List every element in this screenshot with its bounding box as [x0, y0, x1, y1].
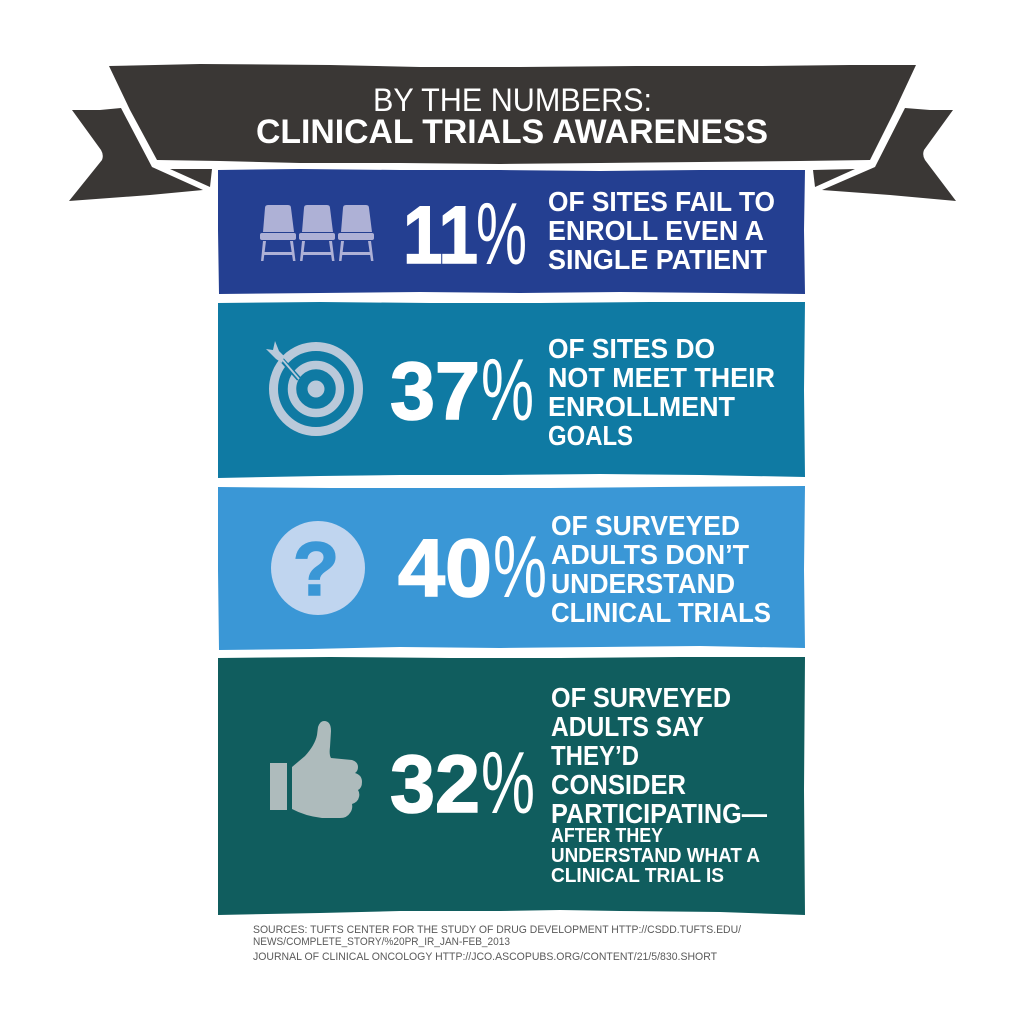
statistic: 37%: [390, 340, 534, 439]
icon: thumbs up: [270, 721, 362, 818]
statistic: 40%: %: [493, 517, 547, 616]
description: ENROLL EVEN A: [548, 215, 764, 246]
banner title text: [256, 82, 768, 151]
description: AFTER THEY: [551, 825, 664, 847]
banner title text: CLINICAL TRIALS AWARENESS: [256, 113, 768, 151]
description: ADULTS DON’T: [551, 539, 749, 570]
statistic: 11%: [403, 184, 527, 283]
description: CONSIDER: [551, 769, 686, 800]
title banner: [69, 64, 956, 201]
description: ENROLLMENT: [548, 391, 735, 422]
statistic: 32%: 32: [390, 739, 480, 830]
description: [551, 682, 767, 887]
panel: 40 percent of adults: [218, 486, 805, 650]
statistic: 32%: [390, 733, 535, 832]
banner right tail: [813, 108, 956, 201]
description: CLINICAL TRIALS: [551, 597, 771, 628]
description: OF SITES DO: [548, 333, 715, 364]
statistic: 37%: %: [481, 340, 534, 439]
banner title text: BY THE NUMBERS:: [373, 82, 652, 118]
description: UNDERSTAND WHAT A: [551, 845, 760, 867]
description: OF SURVEYED: [551, 510, 740, 541]
icon: question mark: ?: [293, 527, 339, 612]
description: [548, 186, 775, 275]
panel: 32 percent of adults: [218, 657, 805, 915]
sources: JOURNAL OF CLINICAL ONCOLOGY HTTP://JCO.ASCOPUBS.ORG/CONTENT/21/5/830.SHORT: [253, 951, 717, 963]
banner main ribbon: [109, 64, 916, 164]
statistic: 32%: %: [481, 733, 535, 832]
description: [551, 510, 771, 628]
panel background: [218, 657, 805, 915]
description: ADULTS SAY: [551, 711, 704, 742]
statistic: 11%: %: [476, 184, 527, 283]
statistic: 40%: [398, 517, 547, 616]
panel background: [218, 486, 805, 650]
statistic: 37%: 37: [390, 346, 480, 437]
panel background: [218, 169, 805, 294]
statistic: 40%: 40: [398, 523, 492, 614]
description: [548, 333, 775, 451]
sources: [253, 924, 742, 963]
description: SINGLE PATIENT: [548, 244, 767, 275]
statistic: 11%: 11: [403, 190, 478, 281]
panel: 37 percent of sites: [218, 302, 805, 478]
description: OF SITES FAIL TO: [548, 186, 775, 217]
icon: three chairs: [260, 205, 374, 261]
description: PARTICIPATING—: [551, 798, 767, 829]
sources: NEWS/COMPLETE_STORY/%20PR_IR_JAN-FEB_2013: [253, 936, 510, 948]
icon: target with arrow: [266, 341, 358, 432]
icon: question mark: [271, 521, 365, 615]
description: OF SURVEYED: [551, 682, 731, 713]
description: NOT MEET THEIR: [548, 362, 775, 393]
description: UNDERSTAND: [551, 568, 735, 599]
description: GOALS: [548, 420, 633, 451]
panel: 11 percent of sites: [218, 169, 805, 294]
sources: SOURCES: TUFTS CENTER FOR THE STUDY OF DRUG DEVELOPMENT HTTP://CSDD.TUFTS.EDU/: [253, 924, 742, 936]
description: CLINICAL TRIAL IS: [551, 865, 724, 887]
description: THEY’D: [551, 740, 639, 771]
panel background: [218, 302, 805, 478]
banner left tail: [69, 108, 212, 201]
